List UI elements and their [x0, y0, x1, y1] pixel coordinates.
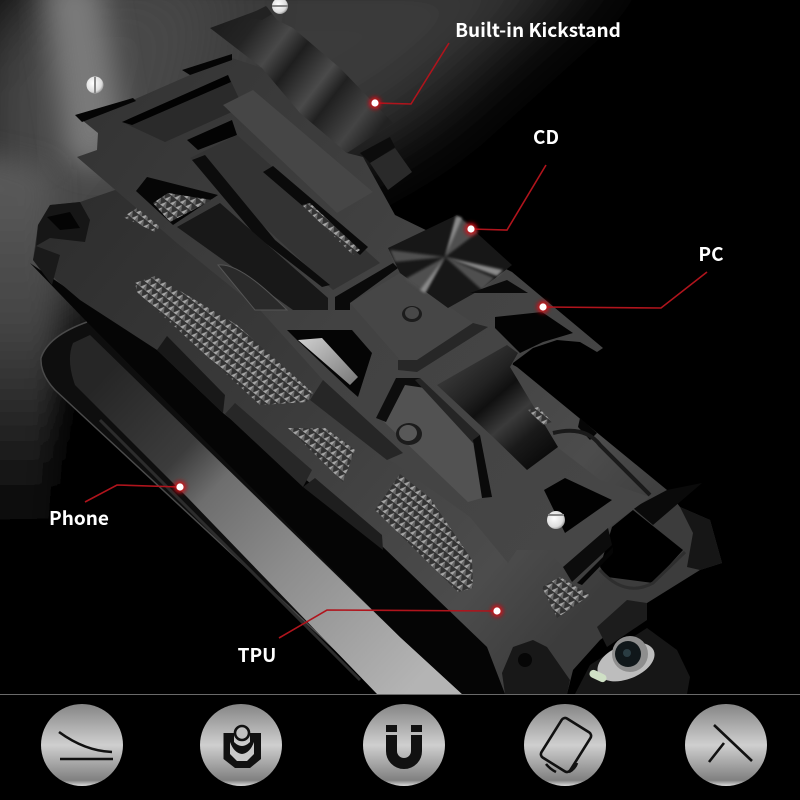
grip patch large upper [135, 276, 313, 405]
grip patch small right [528, 407, 552, 425]
callout: PC: PC [698, 240, 724, 267]
case side wall [30, 263, 510, 694]
camera opening [600, 510, 683, 583]
centre bevel [398, 323, 488, 372]
phone edge highlight [100, 420, 360, 680]
under kickstand slot [360, 137, 395, 163]
icon: phone with vibration arcs [524, 704, 606, 786]
slot top [182, 54, 232, 75]
phone outer rim [41, 322, 383, 694]
main plate [77, 58, 650, 567]
big recess [177, 203, 328, 310]
grip patch large lower [375, 474, 473, 592]
phone screen strip [70, 335, 462, 694]
triangular window [136, 177, 218, 225]
slot centre [335, 263, 398, 310]
central cavity [190, 135, 380, 290]
black hole [187, 120, 237, 150]
top window [122, 75, 243, 142]
TPU case body [33, 190, 722, 694]
grip patch small left [123, 208, 160, 232]
callout: TPU: TPU [238, 641, 276, 668]
ridge upper [157, 336, 225, 413]
kickstand top fold [210, 6, 393, 153]
top-left corner lug [33, 202, 90, 285]
lower bumper [597, 600, 647, 647]
bottom lug [502, 640, 570, 694]
X frame window [287, 330, 372, 397]
ridge middle [225, 403, 312, 487]
metal dark triangle below [470, 280, 528, 293]
bottom icon band [0, 694, 800, 800]
callout: TPU [238, 605, 503, 668]
right window [495, 312, 573, 353]
triangular camera window [544, 478, 612, 533]
camera rim arc [553, 431, 650, 495]
phone rim in recess [218, 265, 287, 310]
callout: CD [465, 123, 559, 235]
phone [41, 322, 520, 694]
lower panel [380, 380, 482, 502]
grip patch middle [288, 428, 355, 482]
callout: Built-in Kickstand: Built-in Kickstand [455, 16, 621, 43]
camera ring [600, 552, 685, 588]
bumper tab [633, 483, 702, 525]
grip strip centre [302, 203, 360, 255]
PC plate [75, 54, 650, 582]
ridge lower [303, 478, 383, 550]
centre panel [350, 273, 473, 360]
spring arm [192, 155, 330, 287]
slot left [75, 98, 136, 122]
rear camera module [575, 628, 690, 694]
case back [33, 190, 722, 694]
icon: kickstand ring shield [200, 704, 282, 786]
right bumper [680, 507, 722, 570]
callout: Phone: Phone [49, 504, 109, 531]
bump upper [402, 306, 422, 322]
lower panel top-left edge [376, 378, 425, 422]
small dark tab [578, 418, 597, 440]
icon: angled stand lines [685, 704, 767, 786]
kickstand inner plate [223, 90, 373, 213]
kickstand rail [370, 148, 412, 190]
screw lower [547, 511, 565, 529]
edge rib [310, 380, 403, 460]
plate shadow [563, 528, 612, 582]
lower panel right edge [473, 435, 492, 498]
bump lower [396, 423, 422, 445]
grip patch lower right [542, 577, 590, 618]
icon: magnet [363, 704, 445, 786]
screw top [272, 0, 288, 14]
icon: curved slim profile [41, 704, 123, 786]
CD metal plate [388, 215, 528, 308]
screw top left [86, 76, 104, 94]
kickstand lower fold [437, 345, 558, 470]
callout: Built-in Kickstand [369, 16, 621, 109]
cavity inner strip [263, 166, 368, 255]
callout: Phone [49, 481, 186, 531]
inner strip [577, 547, 613, 585]
textured grip patches [123, 193, 590, 618]
callout: PC [537, 240, 724, 313]
callout: CD: CD [533, 123, 559, 150]
phone body [41, 322, 520, 694]
lower panel top-right rib [415, 378, 480, 443]
grip patch window [153, 193, 212, 222]
